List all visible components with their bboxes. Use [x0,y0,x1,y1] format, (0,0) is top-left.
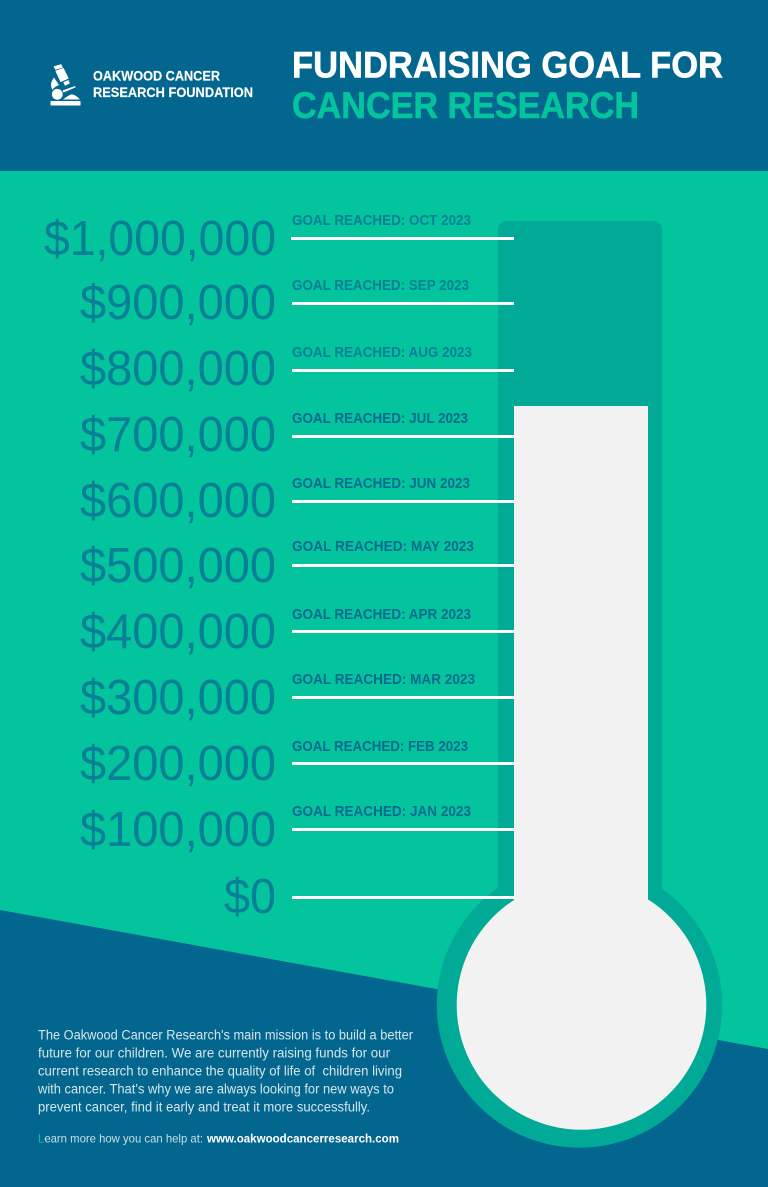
dollar scale labels: $0 [224,870,276,924]
logo: organisation name: OAKWOOD CANCER [93,68,220,84]
mission text block: prevent cancer, find it early and treat it more successfully. [38,1100,370,1115]
goal labels not yet reached: GOAL REACHED: OCT 2023 [292,212,471,229]
dollar scale labels: $1,000,000 [44,212,276,266]
mission text block: The Oakwood Cancer Research's main mission is to build a better [38,1027,413,1042]
header band [0,0,768,171]
scale tick lines [291,237,514,899]
goal labels reached: GOAL REACHED: FEB 2023 [292,738,468,755]
thermometer fill [457,406,706,1130]
goal labels reached: GOAL REACHED: JUL 2023 [292,410,468,427]
dollar scale labels: $500,000 [80,539,276,593]
logo: organisation name [93,68,253,100]
dollar scale labels: $300,000 [80,671,276,725]
mission text block: with cancer. That’s why we are always looking for new ways to [37,1081,394,1096]
dollar scale labels: $800,000 [80,342,276,396]
dollar scale labels: $900,000 [80,276,276,330]
goal labels not yet reached: GOAL REACHED: AUG 2023 [292,344,472,361]
goal labels reached: GOAL REACHED: JAN 2023 [292,803,471,820]
goal labels reached: GOAL REACHED: MAR 2023 [292,671,475,688]
dollar scale labels: $700,000 [80,408,276,462]
dollar scale labels: $100,000 [80,803,276,857]
dollar scale labels: $200,000 [80,737,276,791]
title: FUNDRAISING GOAL FOR [292,44,723,86]
thermometer outer shell [437,221,722,1148]
goal labels reached: GOAL REACHED: JUN 2023 [292,475,470,492]
dollar scale labels: $400,000 [80,605,276,659]
dollar scale labels [44,212,276,924]
goal labels reached: GOAL REACHED: MAY 2023 [292,538,474,555]
logo: organisation name: RESEARCH FOUNDATION [93,85,253,100]
goal labels reached: GOAL REACHED: APR 2023 [292,606,471,623]
goal labels reached [292,410,475,820]
dollar scale labels: $600,000 [80,474,276,528]
mission text block: future for our children. We are currently raising funds for our [38,1045,390,1060]
bottom diagonal blue panel [0,910,768,1187]
goal labels not yet reached: GOAL REACHED: SEP 2023 [292,277,469,294]
call to action with website: Learn more how you can help at: [38,1132,203,1146]
goal labels not yet reached [292,212,472,361]
mission text block [37,1027,413,1115]
call to action with website: www.oakwoodcancerresearch.com [206,1132,399,1146]
logo: microscope icon [50,64,80,106]
call to action with website [38,1132,399,1146]
title [292,44,723,126]
title: CANCER RESEARCH [292,84,639,126]
mission text block: current research to enhance the quality of life of children living [38,1064,402,1078]
